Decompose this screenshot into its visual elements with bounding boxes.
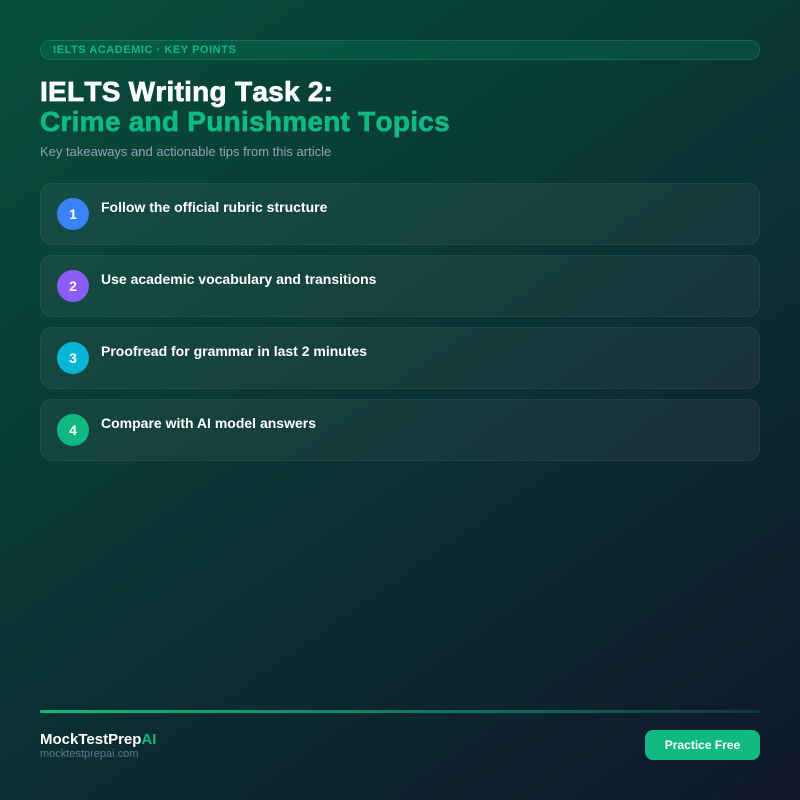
panel: point 1 — [40, 183, 760, 245]
panel: point 2 — [40, 255, 760, 317]
icon: number 3: 3 — [69, 350, 77, 366]
icon: number 4 — [57, 414, 89, 446]
badge — [40, 40, 760, 60]
text: point 1: Follow the official rubric structure — [101, 199, 327, 215]
icon: number 1 — [57, 198, 89, 230]
badge: IELTS ACADEMIC · KEY POINTS — [53, 44, 236, 56]
brand name: MockTestPrepAI — [40, 731, 156, 748]
icon: number 2 — [57, 270, 89, 302]
panel: point 3 — [40, 327, 760, 389]
text: point 4: Compare with AI model answers — [101, 415, 316, 431]
footer divider — [40, 710, 760, 713]
website: mocktestprepai.com — [40, 748, 138, 760]
icon: number 2: 2 — [69, 278, 77, 294]
button: practice free — [645, 730, 760, 760]
icon: number 4: 4 — [69, 422, 77, 438]
button: practice free: Practice Free — [665, 738, 740, 752]
subtitle: Key takeaways and actionable tips from this article — [40, 144, 331, 159]
title line 1: IELTS Writing Task 2: — [40, 76, 333, 107]
title line 2: Crime and Punishment Topics — [40, 106, 450, 137]
icon: number 1: 1 — [69, 206, 77, 222]
icon: number 3 — [57, 342, 89, 374]
text: point 3: Proofread for grammar in last 2 minutes — [101, 343, 367, 359]
text: point 2: Use academic vocabulary and transitions — [101, 271, 376, 287]
panel: point 4 — [40, 399, 760, 461]
